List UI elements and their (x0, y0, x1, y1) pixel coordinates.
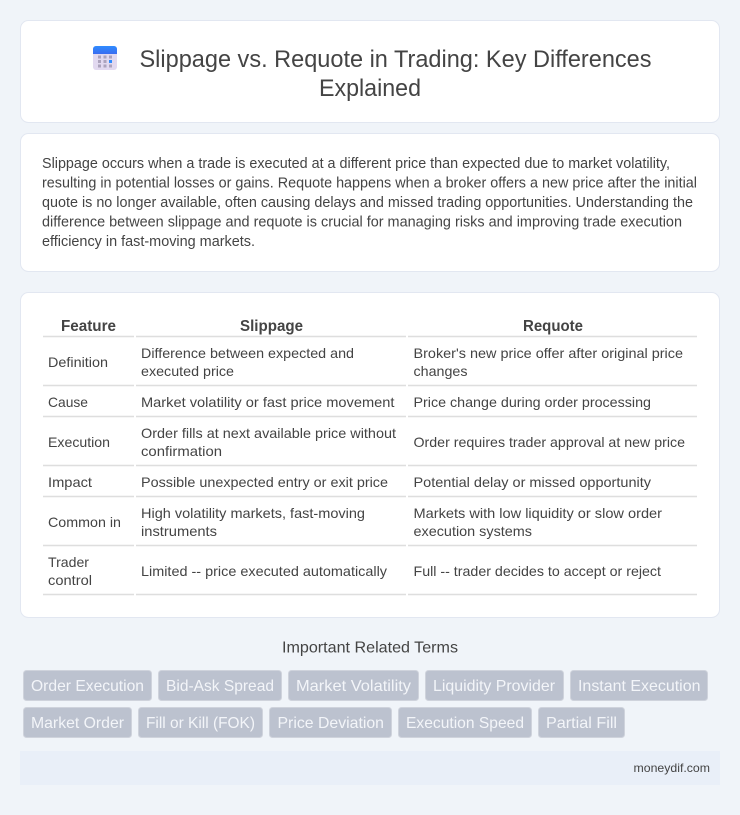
table header: Feature (61, 318, 116, 335)
related term chips: Fill or Kill (FOK) (146, 715, 255, 732)
panel: comparison table (20, 292, 720, 618)
panel: header (20, 20, 720, 122)
row: common in: Common in (48, 514, 121, 530)
panel: intro paragraph (20, 134, 720, 272)
related term chips: Market Volatility (296, 678, 411, 695)
related term chips: Order Execution (31, 678, 144, 695)
footer bar: moneydif.com (634, 761, 710, 775)
table header: Slippage (240, 318, 303, 335)
row: trader control: Limited -- price executed automatically (141, 563, 387, 579)
row: definition: Difference between expected and (141, 345, 354, 361)
row: definition (48, 345, 683, 379)
row: impact: Possible unexpected entry or exit price (141, 474, 388, 490)
row: common in: High volatility markets, fast-moving (141, 505, 365, 521)
row: impact (48, 474, 651, 490)
row: execution: Order requires trader approval at new price (414, 434, 685, 450)
text block: intro: quote is no longer available, often causing delays and missed trading opportunities. Understanding the (42, 195, 693, 211)
row: cause: Price change during order processing (414, 394, 651, 410)
related term chips (24, 670, 708, 738)
text block: intro: Slippage occurs when a trade is executed at a different price than expected due to market volatility, (42, 156, 670, 172)
row: common in: execution systems (414, 523, 532, 539)
row: cause (48, 394, 651, 410)
table header (61, 318, 583, 335)
related term chips: Price Deviation (278, 715, 384, 732)
related term chips: Bid-Ask Spread (166, 678, 274, 695)
heading: important related terms: Important Related Terms (282, 640, 458, 656)
table header: Requote (523, 318, 583, 335)
row: definition: Broker's new price offer after original price (414, 345, 683, 361)
related term chips: Liquidity Provider (433, 678, 556, 695)
text block: intro: efficiency in fast-moving markets. (42, 234, 255, 250)
icon: calendar (93, 46, 117, 70)
related term chips: Execution Speed (406, 715, 524, 732)
footer bar (20, 751, 720, 785)
title (140, 46, 652, 102)
row: execution: Execution (48, 434, 110, 450)
text block: intro: difference between slippage and requote is crucial for managing risks and improving trade execution (42, 214, 682, 230)
row: cause: Cause (48, 394, 88, 410)
row: impact: Impact (48, 474, 92, 490)
related term chips: Instant Execution (578, 678, 700, 695)
row: cause: Market volatility or fast price movement (141, 394, 395, 410)
title: Explained (319, 75, 421, 102)
row: execution (48, 425, 685, 459)
text block: intro: resulting in potential losses or gains. Requote happens when a broker offers a new price after the initial (42, 176, 697, 192)
row: trader control: control (48, 572, 92, 588)
related term chips: Market Order (31, 715, 125, 732)
row: execution: Order fills at next available price without (141, 425, 396, 441)
row: trader control (48, 554, 661, 588)
row: definition: executed price (141, 363, 234, 379)
related term chips: Partial Fill (546, 715, 617, 732)
text block: intro (42, 156, 697, 250)
title: Slippage vs. Requote in Trading: Key Differences (140, 46, 652, 73)
row: common in (48, 505, 662, 539)
row: trader control: Trader (48, 554, 89, 570)
row: definition: Definition (48, 354, 108, 370)
row: execution: confirmation (141, 443, 222, 459)
row: impact: Potential delay or missed opportunity (414, 474, 651, 490)
row: common in: Markets with low liquidity or slow order (414, 505, 662, 521)
row: definition: changes (414, 363, 468, 379)
row: common in: instruments (141, 523, 217, 539)
row: trader control: Full -- trader decides to accept or reject (414, 563, 661, 579)
